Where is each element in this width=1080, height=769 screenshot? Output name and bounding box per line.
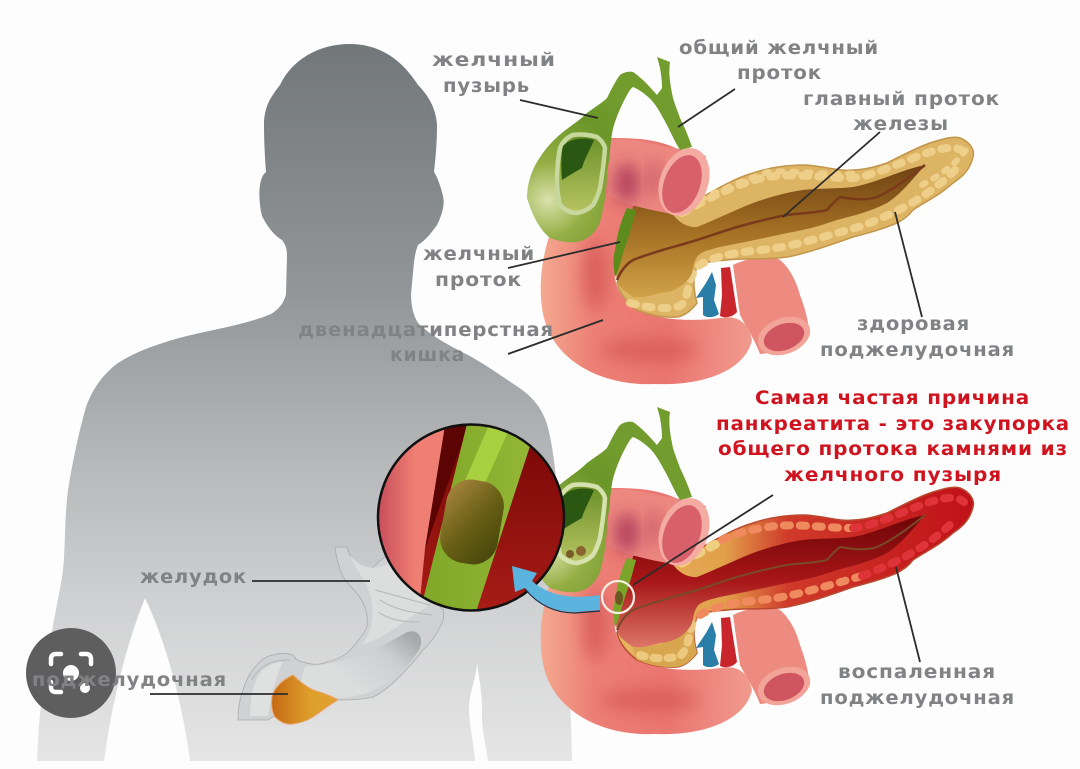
label: main duct: главный проток xyxy=(803,88,1000,110)
duodenum xyxy=(541,138,752,384)
inflamed cavity xyxy=(616,515,925,647)
label: gallbladder: желчный xyxy=(432,49,556,71)
blood vessels xyxy=(696,617,737,667)
leader lines xyxy=(150,89,922,694)
duodenal bulb xyxy=(608,139,719,223)
callout line 1: Самая частая причина xyxy=(755,387,1030,409)
healthy organs xyxy=(527,57,973,384)
inflamed pancreas xyxy=(616,487,973,667)
callout line 4: желчного пузыря xyxy=(784,464,1002,486)
label: common bile duct: общий желчный xyxy=(679,37,879,59)
label: pancreas: поджелудочная xyxy=(32,669,227,691)
callout line 2: панкреатита - это закупорка xyxy=(716,413,1070,435)
small intestine loop xyxy=(733,257,816,362)
stomach xyxy=(238,547,444,724)
image search badge xyxy=(26,628,116,718)
label: stomach: желудок xyxy=(140,566,247,588)
label: duodenum: двенадцатиперстная xyxy=(298,319,554,341)
label: gallbladder line 2: пузырь xyxy=(443,75,530,97)
blood vessels xyxy=(696,267,737,317)
stomach pancreas xyxy=(272,675,338,724)
pancreas lobules xyxy=(630,148,966,308)
label: bile duct: желчный xyxy=(423,243,535,265)
callout line 3: общего протока камнями из xyxy=(718,438,1068,460)
magnifier circle: blocked duct xyxy=(370,420,564,620)
inflamed lobules xyxy=(640,498,964,658)
label: main duct line 2: железы xyxy=(853,113,949,135)
bile duct xyxy=(614,558,636,627)
bile duct xyxy=(614,208,636,277)
human silhouette xyxy=(37,44,572,761)
blue arrow xyxy=(512,566,600,613)
label: inflamed pancreas: воспаленная xyxy=(838,661,996,683)
small intestine loop xyxy=(733,607,816,712)
label: common bile duct line 2: проток xyxy=(737,62,822,84)
pancreatic duct xyxy=(617,515,925,630)
label: duodenum line 2: кишка xyxy=(390,344,465,366)
pancreatic duct xyxy=(617,165,925,280)
label: healthy pancreas: здоровая xyxy=(857,313,970,335)
gallbladder and ducts xyxy=(527,57,692,277)
inflamed organs xyxy=(527,407,973,734)
gallbladder with stones xyxy=(527,407,692,627)
label: inflamed pancreas line 2: поджелудочная xyxy=(820,687,1015,709)
label: bile duct line 2: проток xyxy=(435,269,522,291)
duodenal bulb xyxy=(608,489,719,573)
healthy pancreas xyxy=(616,137,973,317)
label: healthy pancreas line 2: поджелудочная xyxy=(820,339,1015,361)
duodenum xyxy=(541,488,752,734)
main duct cavity xyxy=(616,165,925,297)
highlight circle on stone xyxy=(602,581,634,613)
